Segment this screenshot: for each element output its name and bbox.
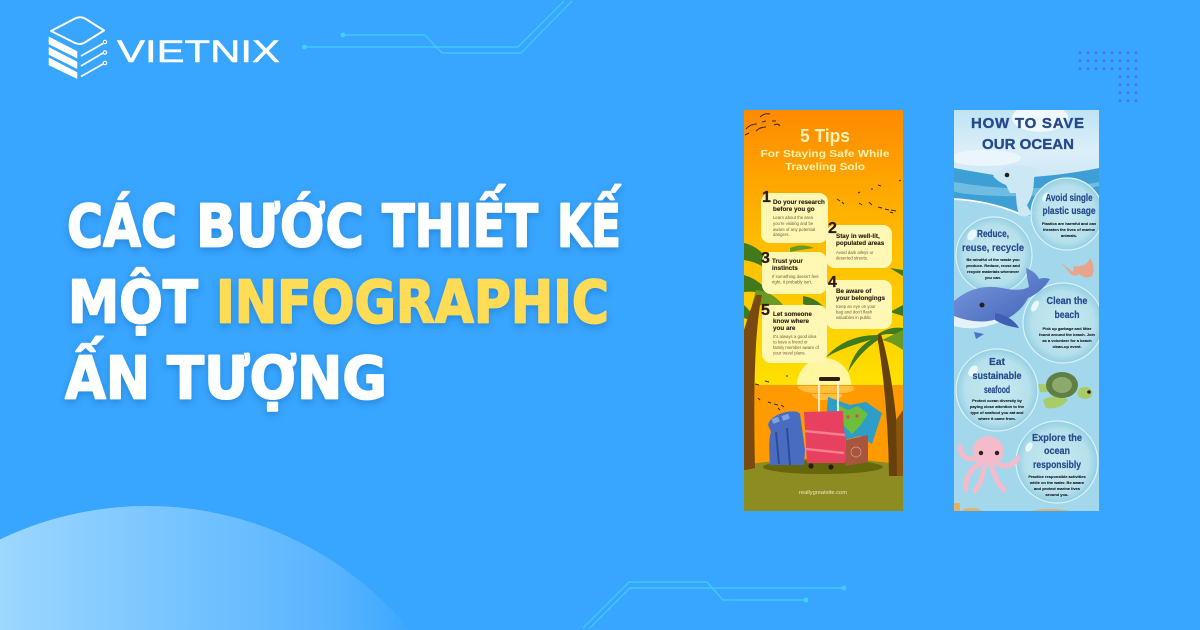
poster title: 5 Tips [800, 126, 850, 146]
icon: suitcase [804, 377, 846, 470]
tip numbers: 5 [761, 302, 770, 319]
highlighted word: INFOGRAPHIC [216, 268, 609, 336]
tip body text: to have a friend or [773, 340, 808, 344]
tip headings: your belongings [836, 295, 885, 302]
poster title: For Staying Safe While [760, 148, 890, 160]
bubble body text: threaten the lives of marine [1043, 227, 1096, 232]
water [954, 199, 1099, 511]
tip body text: Learn about the area [773, 215, 814, 220]
title line 1: BƯỚC [196, 192, 364, 260]
tip numbers [761, 189, 837, 319]
tip body text: family member aware of [773, 345, 820, 350]
website: reallygreatsite.com [799, 490, 847, 496]
tip numbers: 1 [762, 189, 771, 206]
bubble headings: seafood [984, 384, 1010, 396]
waves [954, 168, 1099, 215]
title line 1: CÁC [67, 192, 177, 260]
title line 3 [65, 336, 387, 412]
tip headings: populated areas [836, 240, 885, 247]
tip body text: deserted streets. [836, 256, 868, 260]
poster title [760, 126, 890, 173]
bubble headings: beach [1054, 309, 1080, 321]
tip headings: you are [773, 325, 796, 332]
icon: manta ray [1060, 258, 1094, 278]
poster heading: HOW TO SAVE [971, 115, 1084, 132]
bubble body text: found around the beach. Join [1039, 332, 1096, 337]
bubble headings: plastic usage [1042, 205, 1096, 217]
title [65, 184, 622, 412]
poster title: Traveling Solo [785, 161, 865, 173]
tip numbers: 4 [828, 274, 837, 291]
tip headings: Stay in well-lit, [836, 233, 880, 240]
logo [49, 17, 280, 78]
bubble headings: sustainable [972, 370, 1022, 382]
bubble body text: Protect ocean diversity by [972, 398, 1023, 403]
panel: travel infographic poster [744, 110, 903, 511]
tip body text: you're visiting and be [773, 221, 814, 226]
icon: passport [845, 435, 868, 466]
bubble body text: Pick up garbage and litter [1043, 326, 1092, 331]
logo wordmark: VIETNIX [117, 33, 280, 69]
icon: octopus [960, 436, 1018, 491]
birds [745, 114, 901, 410]
tip cards [761, 193, 892, 363]
bubble body text: you can. [985, 275, 1001, 280]
circuit lines top [302, 1, 572, 53]
icon: backpack [768, 411, 805, 465]
small details bottom [954, 503, 1070, 511]
bubble headings: Reduce, [977, 228, 1009, 240]
tip headings: Be aware of [836, 288, 872, 295]
tip numbers: 2 [828, 220, 837, 237]
tip headings: before you go [773, 206, 815, 213]
tip body text: dangers. [773, 232, 790, 237]
bubble highlights [965, 191, 1051, 453]
palm trunk right [877, 334, 897, 476]
poster heading [972, 118, 1084, 150]
tip headings: know where [773, 318, 810, 325]
panel: ocean infographic poster [949, 104, 1103, 511]
bubble body text: recycle materials whenever [967, 269, 1019, 274]
tip headings [772, 199, 885, 332]
bubble headings: responsibly [1033, 459, 1081, 471]
bubbles [956, 178, 1103, 503]
tip headings: Trust your [772, 258, 803, 265]
title line 1 [67, 184, 622, 260]
circuit lines bottom [583, 582, 846, 628]
bubble body text: Be mindful of the waste you [966, 257, 1020, 262]
title line 3: ẤN [65, 336, 150, 412]
bubble body text: clean-up event. [1052, 344, 1082, 349]
tip headings: Do your research [773, 199, 825, 206]
palm fronds right [825, 268, 903, 372]
tip headings: Let someone [773, 311, 812, 318]
ground [744, 458, 903, 511]
title line 2: MỘT [68, 268, 198, 336]
title line 1: THIẾT [382, 184, 538, 260]
sun [797, 358, 851, 385]
bubble body text: as a volunteer for a beach [1042, 338, 1092, 343]
tip body text: Keep an eye on your [836, 304, 876, 309]
bubble body text: and protect marine lives [1034, 486, 1081, 491]
icon: whale [954, 268, 1050, 339]
icon: turtle [1038, 372, 1092, 408]
bubble body text [966, 221, 1097, 497]
bubble headings: reuse, recycle [962, 242, 1024, 254]
icon: map [826, 397, 882, 444]
tip body text: your travel plans. [773, 350, 806, 356]
tip numbers: 3 [761, 250, 770, 267]
horizon band [744, 385, 903, 465]
palm trunk left [744, 295, 762, 470]
tip body text: aware of any potential [773, 227, 815, 232]
tip body text: It's always a good idea [773, 334, 817, 339]
tip body text: If something doesn't feel [772, 274, 818, 279]
icon: dolphin [993, 172, 1035, 216]
bubble body text: while on the water. Be aware [1029, 480, 1085, 485]
palm fronds left [744, 243, 830, 322]
bubble body text: Plastics are harmful and can [1042, 221, 1097, 226]
tip body text: Avoid dark alleys or [836, 250, 874, 255]
bubble body text: animals. [1061, 233, 1077, 238]
bubble body text: type of seafood you eat and [971, 410, 1024, 415]
bubble body text: where it came from. [977, 416, 1016, 421]
tip headings: instincts [772, 265, 798, 272]
bubble headings: ocean [1044, 445, 1070, 457]
dot grid [1078, 51, 1138, 102]
decorative light blue arc [0, 506, 410, 630]
bubble headings: Explore the [1032, 432, 1082, 444]
icon: server stack [49, 17, 107, 78]
bubble headings: Clean the [1046, 295, 1088, 307]
bubble headings [962, 192, 1096, 471]
bubble body text: produce. Reduce, reuse and [966, 263, 1020, 268]
bubble body text: paying close attention to the [970, 404, 1025, 409]
bubble body text: around you. [1046, 492, 1068, 497]
tip body text [772, 215, 876, 356]
tip body text: right, it probably isn't. [772, 280, 812, 284]
bubble body text: Practice responsible activities [1028, 474, 1086, 479]
bubble headings: Avoid single [1046, 192, 1093, 204]
tip body text: bag and don't flash [836, 310, 873, 314]
title line 1: KẾ [557, 184, 622, 260]
tip body text: valuables in public. [836, 315, 872, 320]
poster heading: OUR OCEAN [982, 136, 1074, 153]
title line 3: TƯỢNG [167, 344, 387, 412]
bubble headings: Eat [989, 356, 1005, 368]
